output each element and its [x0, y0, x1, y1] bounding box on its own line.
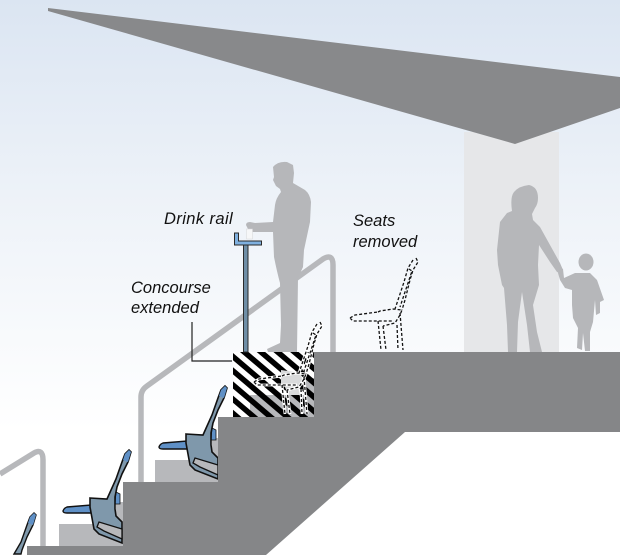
roof: [48, 8, 620, 144]
label: concourse extended: Concourse: [131, 279, 211, 297]
handrail lower: [0, 452, 43, 546]
handrail upper: [141, 257, 333, 482]
concourse extension box: [233, 352, 314, 417]
leader line: [192, 322, 232, 361]
label: seats removed: removed: [353, 233, 418, 251]
label: drink rail: Drink rail: [164, 210, 234, 228]
figure: child: [558, 254, 604, 351]
drink rail: [234, 229, 262, 352]
support column: [464, 132, 559, 352]
sky background: [0, 0, 620, 430]
seat middle row: [63, 450, 131, 543]
seat removed in concourse box: [254, 322, 322, 414]
label: seats removed: Seats: [353, 212, 395, 230]
label: concourse extended: extended: [131, 299, 200, 317]
light step tread lower: [59, 502, 123, 546]
figure: woman: [497, 185, 563, 352]
light step tread upper: [155, 438, 218, 482]
seat upper row: [159, 386, 227, 479]
seat lower row: [14, 513, 36, 554]
stepped concrete stand: [27, 352, 620, 555]
seat removed dashed outline: [350, 258, 418, 350]
figure: man at drink rail: [246, 162, 311, 352]
